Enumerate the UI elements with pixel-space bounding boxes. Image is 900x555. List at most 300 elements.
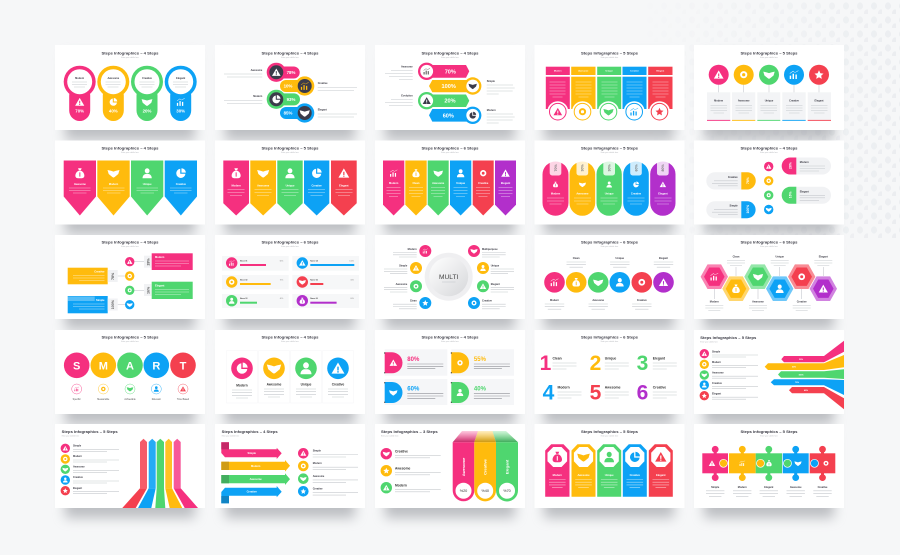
capsule: 85%: 85%: [284, 111, 292, 116]
left nodes: Modern: [408, 248, 417, 251]
arrow: red: [789, 387, 844, 409]
arrow: Creative: Creative: [247, 490, 257, 494]
right nodes: [468, 245, 514, 309]
step: Elegant: Elegant: [176, 77, 185, 80]
banner: Unique: Unique: [456, 181, 466, 185]
column: Elegant: [648, 67, 672, 122]
pill: Creative: [623, 162, 649, 216]
subheading: Enter your subtitle here: [760, 434, 778, 437]
puzzle: Creative: [810, 446, 835, 496]
top labels: Unique: [775, 256, 785, 258]
bar row: 60%: 60%: [280, 260, 284, 262]
heading: Steps Infographics – 5 Steps: [102, 334, 158, 340]
list: Modern: [73, 455, 82, 458]
item 3: [637, 352, 677, 375]
Time Based: Time Based: [177, 399, 190, 401]
list: Awesome: [73, 466, 85, 468]
item 5: 5: [590, 382, 602, 404]
arrow: 100%: 100%: [442, 84, 456, 90]
pill: Elegant: [650, 162, 676, 216]
card: Awesome: [258, 351, 290, 403]
item 1: [540, 352, 576, 375]
puzzle: Creative: Creative: [818, 486, 828, 489]
bottom labels: [545, 299, 652, 309]
box: Elegant: Elegant: [155, 284, 165, 288]
right nodes: Elegant: [491, 283, 500, 286]
left descriptions: [385, 66, 413, 106]
item 6: [637, 382, 677, 404]
tile: 55%: [451, 349, 514, 376]
subheading: Enter your subtitle here: [121, 245, 139, 248]
step: Modern: Modern: [75, 77, 85, 80]
icon column: [125, 257, 134, 309]
arrow: 60%: [429, 107, 481, 124]
capsule: Creative: Creative: [728, 176, 738, 179]
panel: hexagons 6 steps: [694, 235, 844, 319]
top labels: Elegant: [659, 257, 668, 260]
column: Awesome: Awesome: [461, 457, 466, 476]
puzzle: Simple: Simple: [711, 486, 720, 489]
box: Simple: 100%: [111, 299, 115, 309]
bottom labels: Modern: [710, 300, 719, 304]
heading: Steps Infographics – 5 Steps: [581, 50, 638, 55]
pill: Modern: 70%: [554, 164, 558, 172]
banner: Elegant: Elegant: [339, 183, 349, 187]
subheading: Enter your subtitle here: [281, 340, 299, 343]
letter S: S: [73, 360, 80, 372]
capsule: Simple: [706, 201, 756, 218]
panel: multipurpose hub: [375, 235, 525, 319]
right nodes: Unique: [491, 264, 500, 268]
left descriptions: Evolution: [401, 94, 413, 98]
capsule: Creative: [706, 172, 756, 190]
item 6: 6: [637, 382, 648, 404]
item 1: Clean: [552, 356, 562, 360]
hub circle: MULTI: [439, 274, 459, 281]
bar row: 60%: Name 06: [310, 298, 318, 300]
bar row: 30%: 30%: [350, 279, 354, 281]
column: Awesome: [571, 67, 596, 122]
panel: percentage tiles 4 steps: [375, 330, 525, 414]
arrow: Simple: Simple: [247, 451, 257, 455]
list: Simple: [313, 450, 322, 452]
step: Elegant: Elegant: [814, 100, 824, 102]
arrow: yellow: [765, 355, 844, 370]
top labels: Clean: [573, 257, 580, 260]
arrow: pink: 30%: [799, 359, 803, 361]
column: Creative: [474, 431, 496, 501]
pill: Unique: Unique: [605, 192, 614, 196]
arrow: green: 100%: [798, 374, 804, 376]
column: Unique: [597, 444, 621, 497]
banner: Modern: [223, 160, 249, 216]
step: Creative: Creative: [789, 100, 800, 102]
step: Elegant: [808, 65, 831, 121]
panel: arrow banners 4 steps: [55, 140, 205, 224]
tile: 80%: 80%: [407, 357, 420, 363]
banner: Unique: Unique: [143, 182, 152, 186]
hexagon: blue: [766, 276, 793, 301]
heading: Steps Infographics – 5 Steps: [740, 429, 798, 434]
subheading: Enter your subtitle here: [601, 340, 618, 343]
step: Awesome: Awesome: [107, 77, 120, 80]
card: Creative: [322, 351, 354, 403]
list: Creative: [313, 488, 323, 491]
capsule: 93%: [267, 90, 300, 109]
item 3: 3: [637, 352, 648, 375]
capsule: Simple: 100%: [746, 205, 750, 214]
right descriptions: Modern: [487, 109, 496, 112]
arrow: Modern: [221, 460, 290, 472]
panel: circle chain 6 steps: [534, 235, 684, 319]
column: Awesome: [453, 431, 478, 501]
step: Elegant: 30%: [176, 108, 185, 114]
pill: Creative: Creative: [631, 192, 642, 196]
subheading: Enter your subtitle here: [700, 340, 718, 343]
Specific: [72, 384, 82, 401]
pill: Elegant: Elegant: [658, 192, 668, 196]
tile: 55%: 55%: [474, 357, 487, 363]
arrow: 70%: [418, 63, 469, 80]
arrow: pink: [174, 439, 198, 508]
pill: Elegant: 80%: [661, 164, 665, 172]
banner: Awesome: Awesome: [74, 182, 86, 186]
list: Modern: [313, 462, 322, 465]
capsule: Modern: Modern: [800, 161, 809, 164]
hub circle: [425, 253, 473, 301]
item 2: Unique: [605, 356, 616, 360]
right descriptions: Creative: [318, 82, 328, 85]
puzzle: Awesome: [783, 446, 809, 496]
hexagon: yellow: [722, 276, 750, 301]
capsule: 85%: [280, 103, 314, 123]
capsule: Modern: [782, 158, 831, 174]
banner: Awesome: [250, 160, 276, 216]
panel: flared arrows left 5 steps: [694, 330, 844, 414]
banner: Unique: Unique: [286, 183, 295, 187]
bottom labels: Awesome: [752, 300, 764, 304]
step: Elegant: [165, 66, 197, 121]
letter R: R: [152, 360, 160, 372]
arrow: yellow: 50%: [792, 366, 796, 368]
banner: Awesome: Awesome: [257, 183, 270, 187]
list: Simple: [712, 350, 721, 353]
circle row: [544, 272, 674, 293]
list: Awesome: [712, 372, 724, 374]
column: Elegant: Elegant: [504, 459, 510, 474]
item 2: 2: [590, 352, 601, 375]
capsule: 78%: [267, 63, 300, 82]
column: Elegant: [492, 431, 518, 502]
banner: Unique: [450, 160, 471, 216]
panel: arrow bars 4 steps: [375, 45, 525, 130]
left nodes: [384, 245, 431, 309]
item 5: [590, 382, 629, 404]
tile: 40%: [451, 379, 514, 405]
puzzle: Simple: [702, 446, 728, 496]
tile: 40%: 40%: [474, 387, 487, 393]
subheading: Enter your subtitle here: [121, 56, 139, 59]
subheading: Enter your subtitle here: [760, 151, 778, 154]
list: Awesome: [313, 475, 325, 478]
card: Modern: Modern: [236, 384, 248, 388]
item 2: [590, 352, 629, 375]
list: Creative: [395, 449, 408, 453]
item 3: Elegant: [653, 356, 666, 360]
letter M: [90, 352, 116, 378]
item 1: 1: [540, 352, 552, 375]
Time Based: [177, 384, 190, 401]
left descriptions: Awesome: [401, 66, 413, 68]
step: Creative: [131, 66, 163, 121]
capsule: Creative: 78%: [746, 177, 750, 184]
puzzle: Elegant: [756, 446, 782, 496]
list: Elegant: [712, 392, 721, 396]
subheading: Enter your subtitle here: [760, 245, 778, 248]
puzzle: Modern: Modern: [738, 486, 747, 489]
arrow: blue: 70%: [795, 382, 799, 384]
heading: Steps Infographics – 5 Steps: [581, 429, 638, 434]
capsule: Elegant: 16%: [788, 192, 792, 198]
bar row: 40%: [222, 294, 289, 308]
subheading: Enter your subtitle here: [381, 434, 399, 437]
arrow: Awesome: Awesome: [250, 477, 262, 481]
arrow: green: [155, 439, 165, 508]
letter M: M: [99, 360, 108, 372]
panel: ribbon arrows 4 steps: [215, 424, 365, 508]
bar row: 60%: 60%: [350, 298, 354, 300]
list: Modern: [712, 361, 722, 364]
letter T: [170, 352, 196, 378]
panel: rounded pills with tabs 5 steps: [534, 140, 684, 224]
tile: 80%: [385, 349, 447, 376]
step: Modern: 70%: [75, 108, 84, 114]
banner: Awesome: [428, 160, 449, 216]
top labels: [566, 257, 673, 267]
subheading: Enter your subtitle here: [281, 245, 299, 248]
capsule: Simple: Simple: [729, 205, 738, 208]
bar row: 60%: Name 01: [240, 260, 247, 262]
arrow: blue: [771, 379, 844, 395]
letter T: T: [180, 360, 187, 372]
banner: Creative: [304, 160, 329, 216]
arrow: Awesome: [221, 473, 290, 485]
step: Modern: [707, 65, 730, 121]
heading: Steps Infographics – 4 Steps: [262, 334, 318, 340]
step: Creative: [782, 65, 806, 121]
box: Modern: Modern: [155, 255, 165, 259]
item 4: [543, 382, 582, 404]
panel: numbered list 6 steps: [534, 330, 684, 414]
bar row: 60%: [222, 256, 289, 271]
subheading: Enter your subtitle here: [441, 340, 459, 343]
pill: Awesome: Awesome: [576, 192, 589, 196]
list: [61, 444, 119, 495]
card: Creative: Creative: [332, 383, 345, 387]
heading: Steps Infographics – 4 Steps: [102, 146, 158, 150]
item 4: 4: [543, 382, 555, 404]
step: Awesome: 40%: [109, 108, 118, 114]
panel: half circle capsules 4 steps: [694, 140, 844, 224]
heading: Steps Infographics – 4 Steps: [422, 334, 478, 340]
pill: Awesome: [570, 162, 595, 216]
step: Awesome: [732, 65, 755, 121]
panel: puzzle pieces 5 steps: [694, 424, 844, 508]
arrow: red: 40%: [804, 389, 808, 392]
heading: Steps Infographics – 5 Steps: [62, 429, 118, 434]
panel: SMART goals: [55, 330, 205, 414]
step: Awesome: [97, 66, 129, 121]
bar row: 70%: Name 02: [240, 279, 247, 281]
capsule: 10%: 10%: [284, 84, 292, 89]
bar row: 100%: Name 04: [310, 259, 318, 262]
bar row: 60%: [292, 294, 359, 308]
panel: 3D columns 3 steps: [375, 424, 525, 508]
banner: Creative: Creative: [478, 181, 489, 185]
heading: Steps Infographics – 4 Steps: [102, 50, 158, 55]
bottom labels: Creative: [797, 300, 807, 304]
arrow: blue: [138, 439, 156, 508]
subheading: Enter your subtitle here: [222, 434, 239, 437]
bar row: 70%: [222, 275, 289, 289]
bar row: 70%: 70%: [280, 279, 284, 281]
box: Creative: 78%: [111, 272, 115, 280]
list: [381, 448, 441, 493]
letter A: [117, 352, 143, 378]
pill: Creative: 60%: [634, 164, 638, 172]
panel: perspective arrows 5 steps: [55, 424, 205, 508]
column: Creative: Creative: [630, 473, 640, 477]
banner: Unique: [131, 160, 163, 216]
pill: Modern: Modern: [551, 192, 561, 196]
pill: Unique: [596, 162, 622, 216]
heading: Steps Infographics – 5 Steps: [740, 50, 798, 55]
box: Simple: [68, 296, 125, 313]
banner: Modern: Modern: [109, 182, 119, 186]
letter S: [64, 352, 90, 378]
panel: arrow banners 6 steps: [375, 140, 525, 224]
heading: Steps Infographics – 6 Steps: [740, 240, 798, 244]
right descriptions: Elegant: [318, 108, 327, 112]
column: Modern: [545, 444, 570, 497]
bottom labels: Creative: [637, 299, 647, 302]
heading: Steps Infographics – 6 Steps: [581, 240, 638, 244]
banner: Elegant: [331, 160, 357, 216]
letter R: [144, 352, 169, 378]
bottom labels: [705, 289, 811, 310]
arrow: 20%: 20%: [444, 99, 456, 105]
Relevant: [151, 384, 161, 401]
right nodes: Creative: [482, 300, 492, 303]
Relevant: Relevant: [152, 398, 161, 401]
card: Modern: [226, 351, 258, 403]
subheading: Enter your subtitle here: [121, 340, 139, 343]
step: Unique: [757, 65, 780, 121]
arrow: 60%: 60%: [443, 113, 454, 119]
banner: Clean: Clean: [412, 181, 420, 185]
heading: Steps Infographics – 4 Steps: [262, 50, 318, 55]
item 6: Creative: [653, 385, 666, 389]
right descriptions: [318, 82, 357, 117]
bar row: 30%: [292, 275, 359, 289]
step: Awesome: Awesome: [738, 100, 750, 102]
column: Elegant: Elegant: [656, 70, 665, 73]
banner: Modern: [97, 160, 130, 216]
box: Creative: [68, 268, 125, 284]
column: Awesome: Awesome: [577, 473, 590, 477]
heading: Steps Infographics – 6 Steps: [581, 334, 638, 340]
column: Unique: [597, 67, 621, 122]
hexagon: red: [788, 264, 815, 289]
heading: Steps Infographics – 6 Steps: [262, 240, 318, 244]
hexagon: pink: [701, 264, 728, 289]
right descriptions: [487, 80, 515, 123]
left descriptions: Awesome: [251, 69, 263, 72]
capsule: 78%: 78%: [287, 70, 295, 75]
heading: Steps Infographics – 4 Steps: [222, 429, 278, 434]
column: Elegant: %70: [503, 489, 511, 493]
left nodes: Clean: [410, 300, 417, 303]
banner: Modern: Modern: [389, 181, 399, 185]
panel: arrow banners 5 steps: [215, 140, 365, 224]
box: Creative: Creative: [94, 270, 105, 274]
heading: Steps Infographics – 4 Steps: [422, 50, 478, 55]
top labels: Unique: [616, 257, 625, 260]
panel: circle drops 4 steps: [55, 45, 205, 130]
banner: Elegant: Elegant: [501, 181, 510, 185]
puzzle: Awesome: Awesome: [790, 486, 802, 489]
box: Modern: [134, 253, 193, 270]
capsule: 10%: [280, 76, 314, 96]
panel: circles with grey cards 5 steps: [694, 45, 844, 130]
heading: Steps Infographics – 6 Steps: [422, 146, 478, 150]
bottom labels: Modern: [550, 299, 559, 302]
top labels: Elegant: [819, 256, 828, 258]
list: Creative: [712, 382, 722, 385]
subheading: Enter your subtitle here: [601, 151, 618, 154]
list: Modern: [395, 483, 407, 487]
list: Simple: [73, 444, 82, 448]
hexagon: green: [744, 264, 772, 289]
bar row: 40%: Name 03: [240, 298, 247, 300]
subheading: Enter your subtitle here: [601, 434, 618, 437]
banner: Modern: Modern: [231, 183, 241, 187]
list: [700, 349, 758, 400]
banner: Awesome: [64, 160, 96, 216]
card: Awesome: Awesome: [267, 383, 282, 387]
column: Unique: Unique: [605, 71, 614, 73]
step: Unique: Unique: [765, 100, 774, 102]
column: Unique: Unique: [605, 473, 614, 477]
box: Elegant: 16%: [146, 286, 150, 294]
tile: 60%: 60%: [407, 387, 420, 393]
column: Elegant: Elegant: [656, 473, 666, 477]
bottom labels: Awesome: [592, 299, 605, 302]
step: Modern: Modern: [714, 100, 724, 102]
step: Creative: Creative: [142, 77, 153, 80]
list: Creative: [73, 476, 83, 479]
box: Elegant: [134, 282, 193, 299]
panel: icon cards 4 steps: [215, 330, 365, 414]
hexagon: purple: [810, 276, 837, 301]
heading: Steps Infographics – 5 Steps: [581, 146, 638, 150]
right nodes: Multipurpose: [482, 248, 498, 251]
column: Awesome: [572, 444, 596, 497]
left nodes: Awesome: [396, 283, 408, 286]
column: Modern: Modern: [553, 473, 562, 477]
Achievable: [124, 384, 136, 401]
banner: Clean: [405, 160, 427, 216]
